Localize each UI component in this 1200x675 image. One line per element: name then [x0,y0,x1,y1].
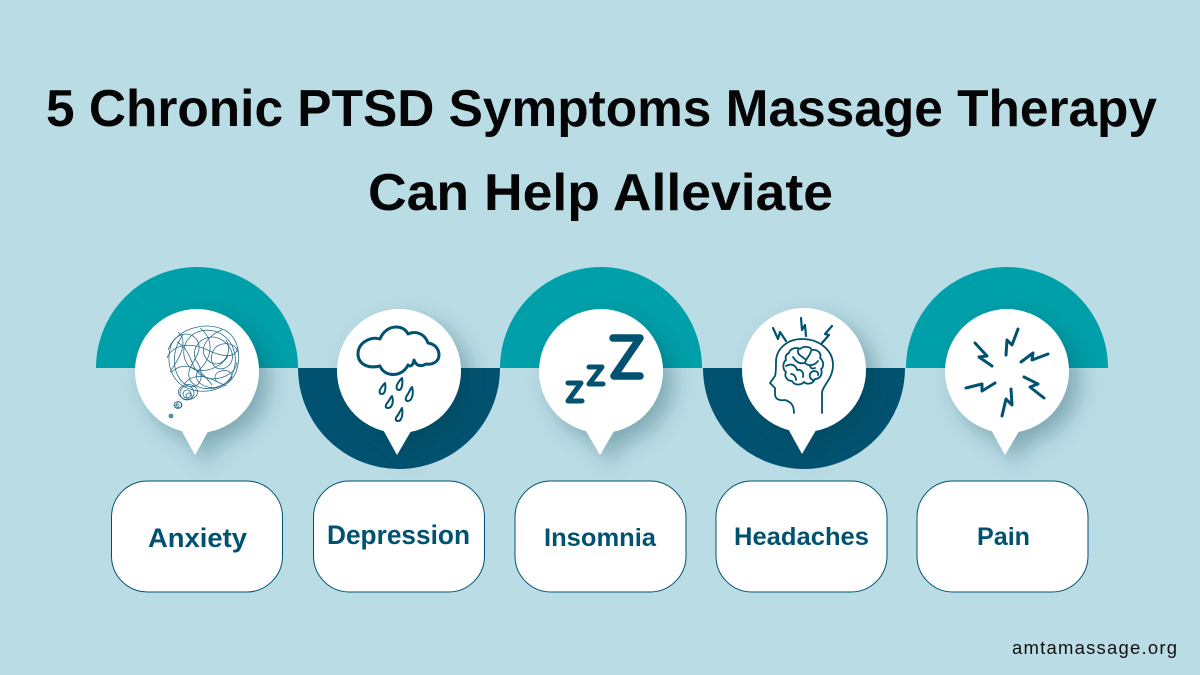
icon: head with brain and bolts [770,318,833,413]
pin: pain [945,309,1069,455]
label card: Pain: Pain [977,523,1030,551]
wave band of half circles [96,267,1108,469]
label card: Insomnia [515,481,686,592]
title: Can Help Alleviate [368,164,833,222]
label card: Depression [314,481,484,592]
label card: Headaches: Headaches [734,523,869,551]
icon: rain cloud [358,327,439,421]
pin: depression [337,309,461,455]
source credit: amtamassage.org [1012,637,1177,658]
label card: Anxiety [112,481,282,592]
pin: anxiety [135,309,259,455]
label card: Depression: Depression [327,520,470,550]
label card: Anxiety: Anxiety [148,523,247,553]
title: 5 Chronic PTSD Symptoms Massage Therapy [46,80,1157,138]
label card: Pain [917,481,1088,592]
icon: radiating pain bolts [966,329,1048,416]
label card: Insomnia: Insomnia [544,524,657,552]
pin: insomnia [539,309,663,455]
pin: headaches [742,308,866,454]
label card: Headaches [716,481,887,592]
title [46,80,1157,222]
icon: tangled thought bubble [167,326,239,418]
icon: sleeping letters [568,338,640,401]
